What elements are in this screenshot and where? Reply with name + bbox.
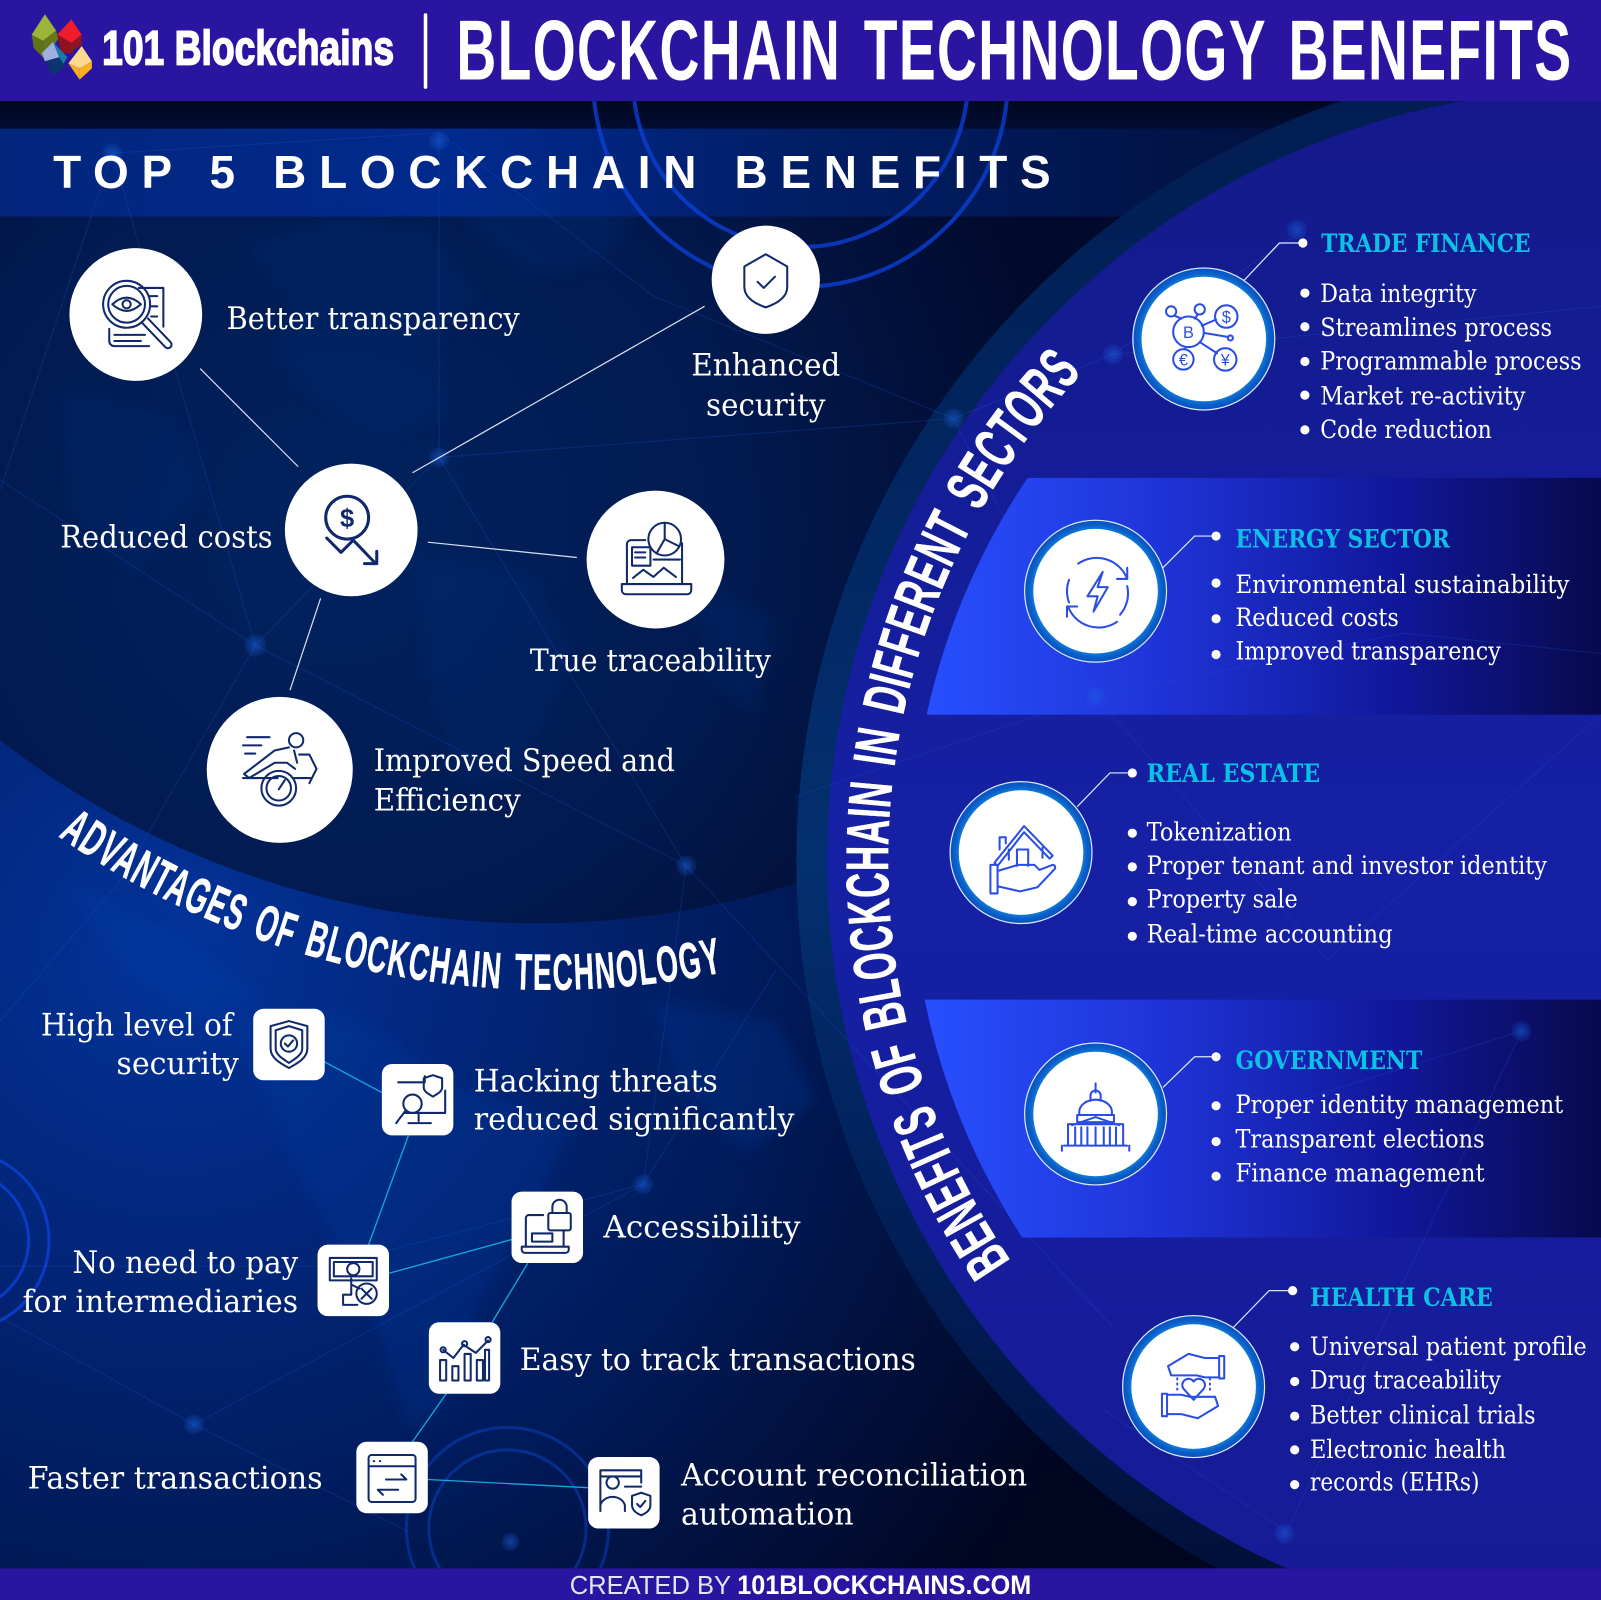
connector and title dot	[1077, 773, 1128, 807]
list: health care: Drug traceability	[1310, 1366, 1501, 1396]
background: dark strip under header	[0, 101, 1327, 129]
heading: benefits in sectors curved: BENEFITS OF BLOCKCHAIN IN DIFFERENT SECTORS	[846, 350, 1078, 1282]
icon: bar chart with trend	[440, 1337, 491, 1380]
icon: magnifier over document	[103, 281, 172, 348]
label: true traceability: True traceability	[530, 644, 772, 679]
icon: energy cycle	[1067, 558, 1128, 628]
label: hacking threats: reduced significantly	[474, 1102, 795, 1137]
icon: house on hand	[990, 826, 1055, 893]
advantage: no intermediaries	[22, 1245, 389, 1320]
label: no intermediaries: No need to pay	[72, 1246, 299, 1281]
sector: real estate	[950, 759, 1547, 949]
icon: hands and heart	[1162, 1354, 1224, 1418]
title: energy sector: ENERGY SECTOR	[1235, 524, 1451, 554]
sector: energy	[1025, 520, 1570, 667]
currency marks: $	[1222, 309, 1231, 327]
benefit: improved speed	[207, 697, 675, 843]
icon: monitor, shield and magnifier	[396, 1075, 445, 1123]
sector: government	[1025, 1043, 1564, 1188]
icon: shield	[744, 254, 787, 307]
list: health care: Better clinical trials	[1310, 1400, 1536, 1430]
label: account reconciliation: Account reconciliation	[680, 1459, 1027, 1494]
icon: dollar with falling arrow	[326, 496, 377, 564]
connector and title dot	[1244, 243, 1299, 281]
list: government: Transparent elections	[1235, 1125, 1485, 1155]
list: trade finance: Code reduction	[1320, 415, 1492, 445]
advantage: easy tracking	[429, 1322, 916, 1394]
list: health care: records (EHRs)	[1310, 1468, 1479, 1498]
list: trade finance	[1300, 279, 1582, 445]
logo: coloured cubes	[32, 14, 92, 80]
benefit: true traceability	[530, 491, 772, 679]
list: health care: Electronic health	[1310, 1435, 1506, 1465]
label: better transparency: Better transparency	[227, 302, 520, 337]
advantage: hacking threats	[382, 1064, 795, 1137]
list: health care	[1290, 1332, 1587, 1498]
connector and title dot	[1233, 1291, 1289, 1327]
title: health care: HEALTH CARE	[1310, 1283, 1493, 1313]
list: energy: Reduced costs	[1235, 603, 1399, 633]
label: account reconciliation: automation	[681, 1497, 854, 1532]
decorative rings bottom	[404, 1426, 610, 1568]
advantage: accessibility	[512, 1192, 801, 1263]
footer	[0, 1568, 1601, 1600]
connector and title dot	[1163, 1057, 1212, 1087]
panel: sectors main blue area	[827, 89, 1601, 1600]
icon: capitol building	[1062, 1083, 1129, 1151]
currency marks	[1179, 309, 1231, 370]
list: real estate: Property sale	[1147, 885, 1298, 915]
icon: browser window with arrows	[369, 1455, 416, 1502]
icon: runner and gauge	[243, 733, 317, 806]
connectors: advantages	[325, 1062, 588, 1488]
list: real estate	[1128, 817, 1547, 949]
footer site: 101BLOCKCHAINS.COM	[737, 1570, 1031, 1600]
label: enhanced security: Enhanced	[691, 349, 840, 384]
label: faster transactions: Faster transactions	[28, 1462, 323, 1497]
list: trade finance: Data integrity	[1320, 279, 1477, 309]
network nodes	[102, 131, 1532, 1551]
decorative rings left	[0, 1151, 49, 1330]
label: improved speed: Improved Speed and	[374, 744, 675, 779]
title: government: GOVERNMENT	[1235, 1046, 1422, 1076]
benefit: reduced costs	[60, 464, 418, 596]
currency marks: €	[1179, 352, 1188, 370]
benefit: better transparency	[69, 248, 520, 381]
list: energy	[1211, 570, 1570, 667]
list: real estate: Proper tenant and investor identity	[1147, 851, 1547, 881]
panel: energy sector band	[899, 478, 1601, 715]
connectors: top 5 benefits	[200, 306, 705, 690]
title: trade finance: TRADE FINANCE	[1321, 229, 1531, 259]
currency marks: ¥	[1220, 352, 1231, 370]
icon: laptop and padlock	[522, 1200, 571, 1253]
dollar sign: $	[340, 505, 354, 533]
footer credit: CREATED BY	[570, 1572, 731, 1600]
list: government: Proper identity management	[1235, 1090, 1564, 1120]
advantage: high security	[41, 1008, 325, 1082]
section: top 5 heading: TOP 5 BLOCKCHAIN BENEFITS	[53, 146, 1051, 198]
label: improved speed: Efficiency	[374, 784, 521, 819]
label: no intermediaries: for intermediaries	[22, 1285, 298, 1320]
header	[0, 0, 1601, 101]
heading: advantages curved: ADVANTAGES OF BLOCKCHAIN TECHNOLOGY	[58, 811, 716, 990]
decorative rings top	[592, 101, 1009, 288]
logo text: 101 Blockchains	[102, 22, 394, 75]
panel: sectors outer ring	[796, 101, 1463, 1568]
divider	[424, 13, 427, 89]
label: easy tracking: Easy to track transactions	[520, 1343, 916, 1378]
label: accessibility: Accessibility	[602, 1211, 801, 1246]
decorative lower map shapes	[61, 878, 817, 1429]
list: government: Finance management	[1235, 1158, 1485, 1188]
advantage: faster transactions	[28, 1442, 428, 1513]
label: enhanced security: security	[706, 389, 826, 424]
label: high security: security	[116, 1047, 240, 1082]
currency marks: B	[1183, 324, 1194, 342]
connector and title dot	[1163, 536, 1212, 568]
icon: profile card and shield	[600, 1470, 650, 1515]
icon: crypto network	[1166, 304, 1238, 371]
advantage: account reconciliation	[588, 1457, 1027, 1532]
title: real estate: REAL ESTATE	[1147, 759, 1320, 789]
background: dark upper circle	[0, 0, 1601, 923]
list: trade finance: Market re-activity	[1320, 381, 1526, 411]
panel: government band	[899, 1000, 1601, 1238]
label: high security: High level of	[41, 1008, 235, 1043]
icon: banknote and cancel	[330, 1258, 377, 1305]
list: trade finance: Streamlines process	[1320, 313, 1552, 343]
list: government	[1211, 1090, 1564, 1188]
list: energy: Improved transparency	[1235, 637, 1501, 667]
list: real estate: Real-time accounting	[1147, 919, 1393, 949]
decorative map shapes	[61, 174, 776, 786]
icon: shield badge	[271, 1021, 307, 1068]
banner: top 5 background	[0, 129, 1327, 216]
benefit: enhanced security	[691, 226, 840, 424]
list: energy: Environmental sustainability	[1235, 570, 1570, 600]
label: reduced costs: Reduced costs	[60, 520, 273, 555]
sector: health care	[1123, 1283, 1587, 1498]
icon: laptop with charts	[622, 523, 691, 594]
list: real estate: Tokenization	[1147, 817, 1292, 847]
label: hacking threats: Hacking threats	[474, 1065, 718, 1100]
sector: trade finance	[1133, 229, 1582, 445]
